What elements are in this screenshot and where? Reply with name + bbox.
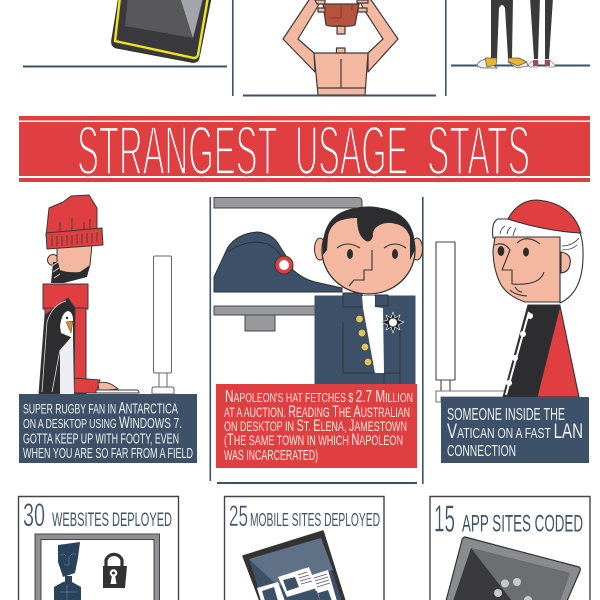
- vertical divider: [210, 197, 211, 481]
- vertical divider: [232, 0, 234, 96]
- title banner: [19, 112, 590, 190]
- caption: Napoleon: NAPOLEON'S HAT FETCHES $ 2.7 MILLION: [225, 386, 413, 406]
- icon: yellow tablet: [112, 0, 211, 62]
- heading: 25: [229, 500, 248, 533]
- lock icon: [103, 554, 127, 588]
- vertical divider: [445, 0, 447, 96]
- panel: websites deployed: WEBSITES DEPLOYED: [52, 509, 172, 531]
- shelf line: [217, 482, 417, 484]
- tablet icon: [446, 537, 580, 600]
- caption: rugby fan: SUPER RUGBY FAN IN ANTARCTICA: [23, 398, 178, 418]
- web page cards: [257, 567, 337, 600]
- caption: Vatican: [441, 397, 589, 463]
- panel: mobile sites deployed: MOBILE SITES DEPLOYED: [250, 509, 380, 530]
- monitor: [436, 242, 518, 402]
- caption: Vatican: CONNECTION: [447, 443, 516, 460]
- figure: [54, 542, 81, 600]
- penguin: [39, 298, 75, 394]
- rugby fan illustration: [39, 195, 174, 394]
- shelf line middle: [243, 94, 436, 96]
- shelf line left: [23, 66, 227, 68]
- caption: Vatican: VATICAN ON A FAST LAN: [447, 420, 583, 443]
- shelf line right: [451, 64, 590, 66]
- monitor and stand: [214, 198, 362, 331]
- caption: rugby fan: WHEN YOU ARE SO FAR FROM A FIELD: [23, 445, 193, 462]
- caption: Napoleon: ON DESKTOP IN ST. ELENA, JAMESTOWN: [224, 416, 407, 435]
- title: STRANGEST: [77, 112, 277, 190]
- monitor: [152, 256, 174, 394]
- panel: app sites coded: 15: [434, 498, 455, 540]
- Pope illustration: [436, 200, 583, 402]
- shirtless man lifting item: [283, 0, 398, 95]
- bicorne hat: [214, 232, 342, 292]
- caption: Napoleon: AT A AUCTION. READING THE AUSTRALIAN: [224, 402, 410, 421]
- monitor frame: [38, 537, 156, 600]
- caption: Napoleon: [216, 384, 417, 468]
- caption: Napoleon: WAS INCARCERATED): [224, 448, 318, 464]
- two pairs of legs with sneakers: [477, 0, 555, 68]
- panel: app sites coded: [430, 496, 590, 600]
- medal: [381, 312, 404, 333]
- vertical divider: [422, 197, 424, 484]
- caption: rugby fan: ON A DESKTOP USING WINDOWS 7.: [23, 413, 182, 432]
- heading: 30: [23, 497, 45, 533]
- panel: mobile sites deployed: [224, 496, 384, 600]
- head: [322, 207, 415, 294]
- tablet icon: [243, 531, 345, 600]
- caption: rugby fan: GOTTA KEEP UP WITH FOOTY, EVEN: [23, 432, 179, 448]
- title: USAGE: [295, 112, 408, 190]
- panel: websites deployed: [18, 496, 178, 600]
- Napoleon illustration: [214, 198, 422, 384]
- uniform: [315, 296, 415, 384]
- caption: rugby fan: [19, 394, 197, 463]
- caption: Napoleon: (THE SAME TOWN IN WHICH NAPOLEON: [224, 430, 403, 449]
